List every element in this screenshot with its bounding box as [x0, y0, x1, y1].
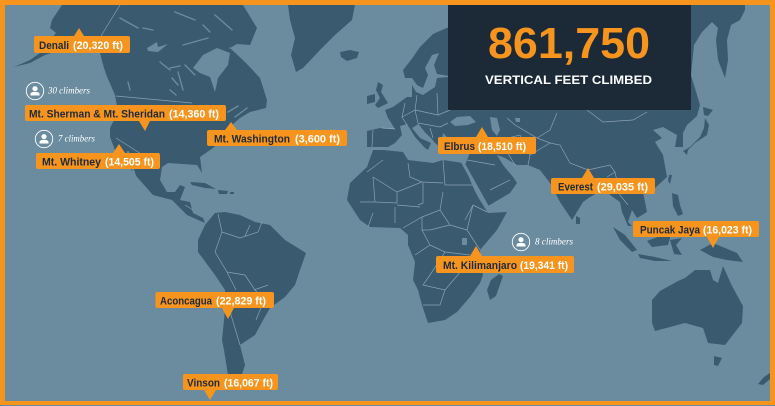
stat caption: VERTICAL FEET CLIMBED: [485, 73, 652, 87]
label: Denali: [34, 28, 130, 53]
label: Mt. Whitney: [36, 144, 160, 169]
label: Vinson: Vinson: [187, 378, 220, 390]
label: Everest: Everest: [558, 182, 593, 194]
North America: [14, 5, 267, 223]
label: Vinson: (16,067 ft): [224, 378, 273, 390]
climbers: 30: 30 climbers: [47, 86, 90, 96]
Baltic Sea: [424, 74, 447, 94]
climbers: 7: 7 climbers: [58, 134, 95, 144]
label: Denali: Denali: [39, 40, 69, 52]
Africa: [347, 150, 507, 323]
label: Puncak Jaya: (16,023 ft): [703, 224, 752, 236]
big number: 861,750: [488, 19, 650, 68]
Scandinavia: [403, 27, 449, 88]
label: Mt. Whitney: (14,505 ft): [105, 156, 154, 168]
label: Aconcagua: (22,829 ft): [216, 296, 266, 308]
label: Mt. Sherman & Mt. Sheridan: [25, 105, 226, 131]
label: Mt. Washington: [207, 122, 347, 146]
climbers: 8: 8 climbers: [535, 236, 573, 246]
label: Mt. Whitney: Mt. Whitney: [42, 156, 102, 168]
Baffin Bay inlets: [147, 42, 168, 52]
Taiwan: [668, 175, 672, 184]
Sri Lanka: [576, 216, 580, 224]
stat panel: vertical feet climbed: [448, 5, 691, 110]
Sulawesi: [670, 238, 682, 255]
label: Mt. Washington: Mt. Washington: [214, 134, 290, 146]
Java: [638, 254, 672, 261]
Hudson Bay: [193, 48, 230, 92]
label: Puncak Jaya: Puncak Jaya: [640, 224, 701, 236]
Sumatra: [613, 227, 637, 252]
Iceland: [340, 50, 359, 61]
New Guinea: [700, 243, 743, 262]
label: Mt. Kilimanjaro: (19,341 ft): [520, 260, 568, 272]
label: Elbrus: [438, 127, 536, 154]
inland waters: [147, 42, 520, 245]
label: Elbrus: Elbrus: [444, 141, 475, 153]
United Kingdom and Ireland: [367, 82, 388, 108]
label: Aconcagua: Aconcagua: [160, 296, 213, 308]
Madagascar: [487, 274, 503, 300]
Caspian Sea: [490, 117, 500, 136]
Borneo: [647, 231, 672, 247]
label: Everest: [551, 168, 655, 194]
label: Everest: (29,035 ft): [597, 182, 648, 194]
climbers: 7: [35, 130, 95, 148]
Australia: [652, 266, 743, 345]
South America: [198, 212, 306, 385]
label: Puncak Jaya: [633, 221, 759, 248]
climbers: 30: [26, 82, 90, 100]
label: Mt. Kilimanjaro: Mt. Kilimanjaro: [443, 260, 517, 272]
label: Denali: (20,320 ft): [73, 40, 123, 52]
Philippines: [672, 193, 683, 216]
Greenland: [288, 5, 355, 72]
Lake Victoria: [462, 238, 467, 245]
Aral Sea: [515, 118, 520, 122]
label: Mt. Kilimanjaro: [436, 246, 574, 273]
label: Vinson: [183, 374, 278, 400]
label: Mt. Sherman & Mt. Sheridan: (14,360 ft): [169, 108, 219, 120]
label: Elbrus: (18,510 ft): [478, 141, 526, 153]
label: Mt. Sherman & Mt. Sheridan: Mt. Sherman & Mt. Sheridan: [29, 108, 165, 120]
Eurasia: [367, 5, 745, 226]
Tasmania: [714, 356, 722, 366]
arctic channels and lakes: [104, 12, 487, 206]
country borders: [101, 5, 647, 345]
Hokkaido and Japan: [683, 107, 713, 155]
New Zealand: [758, 373, 770, 385]
label: Aconcagua: [156, 292, 274, 319]
Black Sea: [450, 116, 476, 126]
climbers: 8: [512, 233, 573, 251]
label: Mt. Washington: (3,600 ft): [295, 134, 340, 146]
Cuba and Hispaniola: [190, 182, 234, 194]
